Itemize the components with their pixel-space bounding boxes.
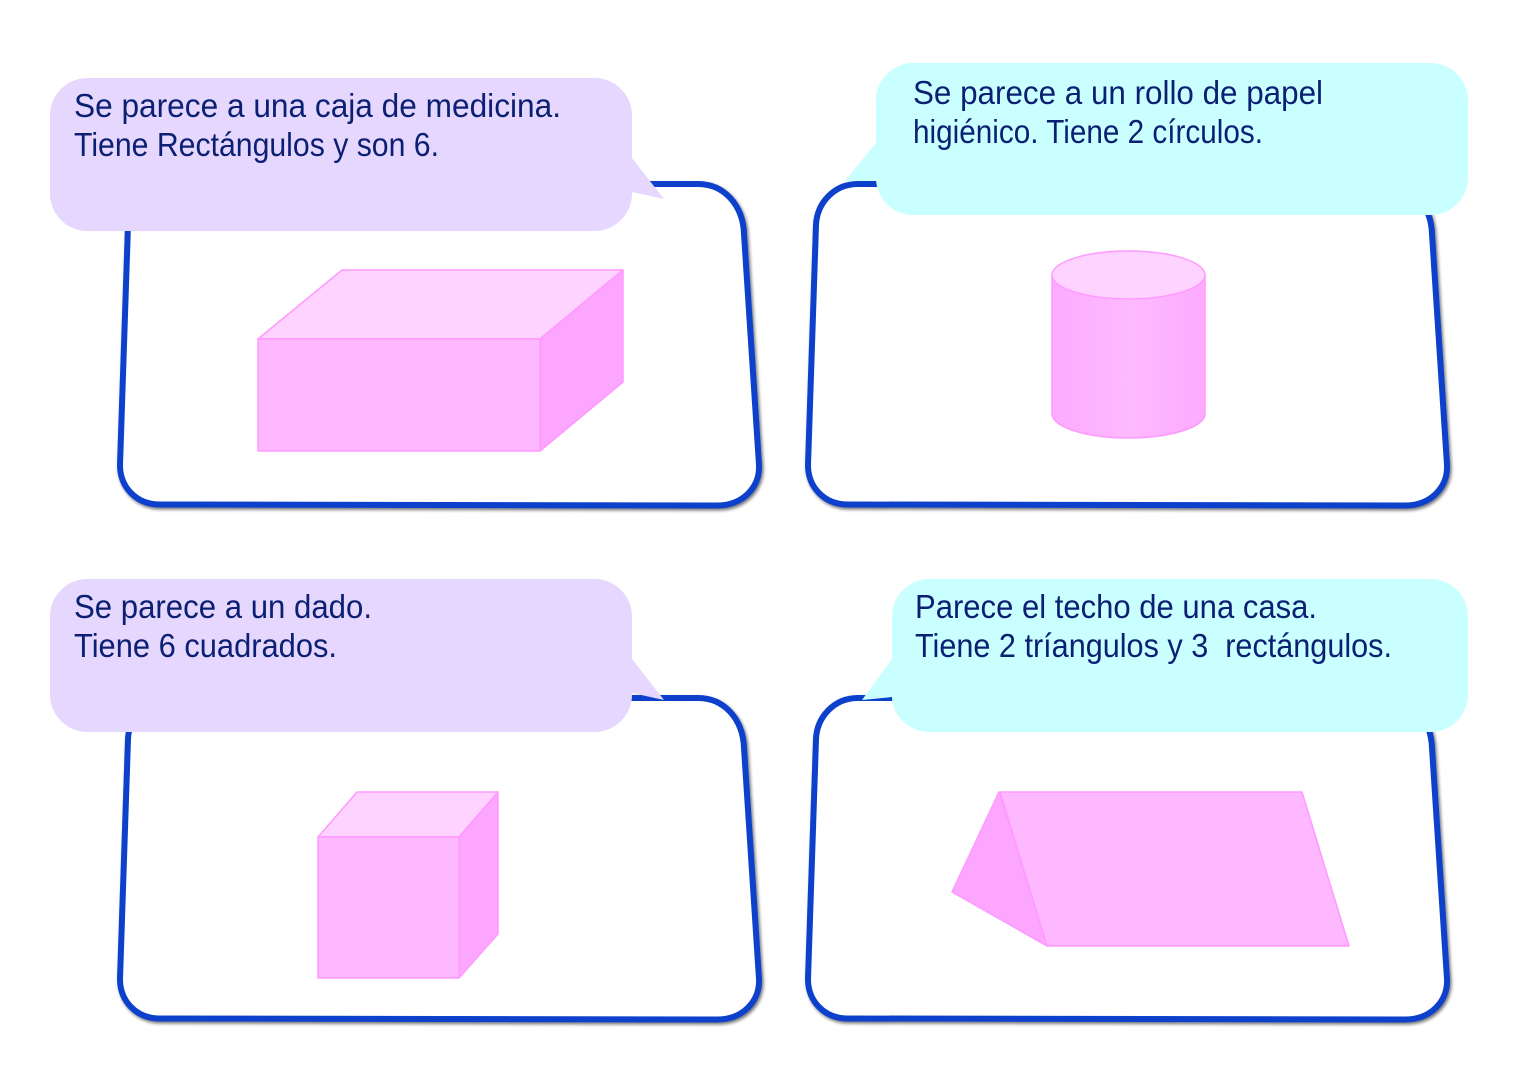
panel: cylinder bbox=[808, 63, 1468, 506]
shape: cube bbox=[318, 792, 498, 978]
speech bubble: cylinder bbox=[845, 63, 1468, 215]
speech bubble: box bbox=[50, 78, 664, 231]
shape: rectangular prism bbox=[258, 270, 623, 451]
panel frame: cube bbox=[120, 698, 759, 1020]
speech bubble: cylinder: higiénico. Tiene 2 círculos. bbox=[913, 113, 1263, 150]
speech bubble: triangular prism bbox=[862, 579, 1468, 732]
speech bubble: cylinder: Se parece a un rollo de papel bbox=[913, 74, 1323, 111]
panel: box bbox=[50, 78, 759, 506]
speech bubble: box: Tiene Rectángulos y son 6. bbox=[74, 126, 439, 163]
speech bubble: triangular prism: Tiene 2 tríangulos y 3 rectángulos. bbox=[915, 627, 1392, 664]
panel: triangular prism bbox=[808, 579, 1468, 1020]
panel frame: triangular prism bbox=[808, 698, 1447, 1020]
speech bubble: cube bbox=[50, 579, 664, 732]
shape: triangular prism bbox=[952, 792, 1349, 946]
speech bubble: box: Se parece a una caja de medicina. bbox=[74, 87, 561, 124]
panel frame: box bbox=[120, 184, 759, 506]
panel: cube bbox=[50, 579, 759, 1020]
panel frame: cylinder bbox=[808, 184, 1447, 506]
speech bubble: cube: Se parece a un dado. bbox=[74, 588, 372, 625]
speech bubble: triangular prism: Parece el techo de una casa. bbox=[915, 588, 1317, 625]
shape: cylinder bbox=[1052, 251, 1205, 438]
speech bubble: cube: Tiene 6 cuadrados. bbox=[74, 627, 337, 664]
